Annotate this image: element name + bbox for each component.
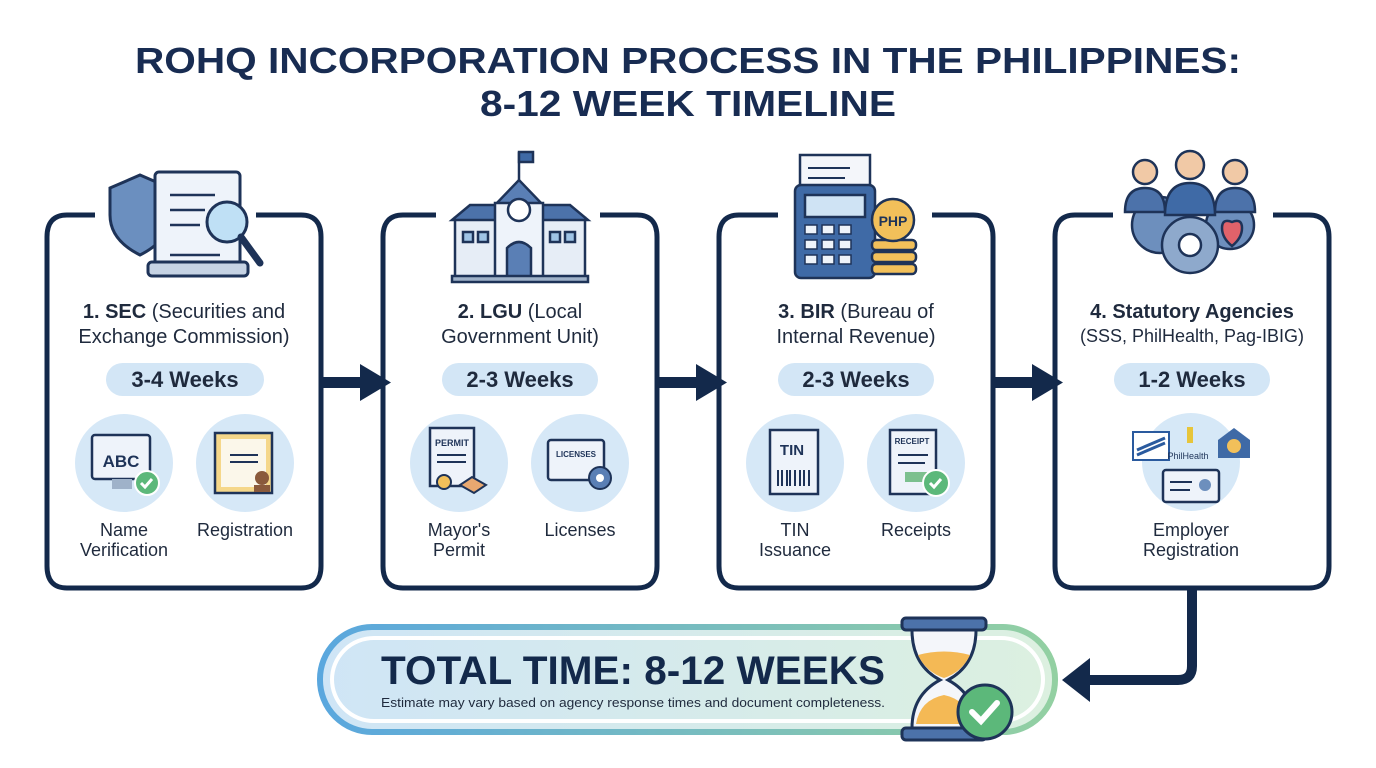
arrow 2 (657, 362, 727, 403)
icon: calculator and coins: PHP (879, 213, 907, 229)
icon: calculator and coins (795, 155, 916, 278)
icon: hourglass with check (902, 618, 1012, 740)
heading: Statutory Agencies: 4. Statutory Agencies (1090, 301, 1294, 323)
icon: receipts (867, 414, 965, 512)
labels: Mayor's (428, 520, 490, 540)
arrow: to total (1062, 588, 1192, 702)
panel: BIR: Receipts (881, 520, 951, 540)
icon: name verification (75, 414, 173, 512)
panel: SEC: Exchange Commission) (78, 326, 290, 348)
panel: LGU: Government Unit) (441, 326, 599, 348)
heading: BIR: 3. BIR (Bureau of (778, 301, 934, 323)
title: 8-12 WEEK TIMELINE (480, 83, 896, 124)
title: ROHQ INCORPORATION PROCESS IN THE PHILIPPINES: (135, 40, 1241, 81)
title (135, 40, 1241, 124)
total time banner: TOTAL TIME: 8-12 WEEKS (381, 649, 885, 693)
labels: TIN (780, 520, 810, 540)
icon: employer registration with logos: PhilHealth (1167, 451, 1209, 461)
icon: people and gears (1125, 151, 1255, 273)
icon: city hall (452, 152, 588, 282)
arrow 1 (321, 362, 391, 403)
panel: SEC: Verification (80, 540, 168, 560)
label: Employer (1153, 520, 1229, 540)
total time banner (320, 627, 1055, 732)
icon: shield and document (110, 172, 260, 276)
icon: licenses (531, 414, 629, 512)
panel: BIR (719, 155, 993, 588)
duration pill (442, 363, 598, 396)
heading: LGU: 2. LGU (Local (458, 301, 582, 323)
icon: mayor's permit (410, 414, 508, 512)
arrow 3 (993, 362, 1063, 403)
panel: LGU: Licenses (544, 520, 616, 540)
duration pill: 2-3 Weeks (802, 367, 910, 392)
duration pill: 3-4 Weeks (131, 367, 239, 392)
panel: BIR: Internal Revenue) (777, 326, 935, 348)
panel: LGU (383, 152, 657, 588)
icon: employer registration with logos (1133, 413, 1250, 511)
duration pill (1114, 363, 1270, 396)
panel: BIR: Issuance (759, 540, 831, 560)
duration pill (778, 363, 934, 396)
panel: Statutory Agencies: (SSS, PhilHealth, Pag-IBIG) (1080, 326, 1304, 346)
panel: Statutory Agencies: Registration (1143, 540, 1239, 560)
icon: mayor's permit: PERMIT (435, 438, 469, 448)
panel: Statutory Agencies (1055, 151, 1329, 588)
icon: name verification: ABC (103, 452, 139, 471)
icon: TIN: TIN (780, 442, 804, 459)
duration pill: 1-2 Weeks (1138, 367, 1246, 392)
duration pill (106, 363, 264, 396)
total time banner: Estimate may vary based on agency response times and document completeness. (381, 695, 885, 710)
icon: TIN (746, 414, 844, 512)
panel: SEC: Registration (197, 520, 293, 540)
labels: Name (100, 520, 148, 540)
icon: registration certificate (196, 414, 294, 512)
panel: SEC (47, 172, 321, 588)
panel: LGU: Permit (433, 540, 485, 560)
icon: licenses: LICENSES (556, 450, 597, 459)
duration pill: 2-3 Weeks (466, 367, 574, 392)
icon: receipts: RECEIPT (895, 437, 929, 446)
heading: SEC: 1. SEC (Securities and (83, 301, 285, 323)
